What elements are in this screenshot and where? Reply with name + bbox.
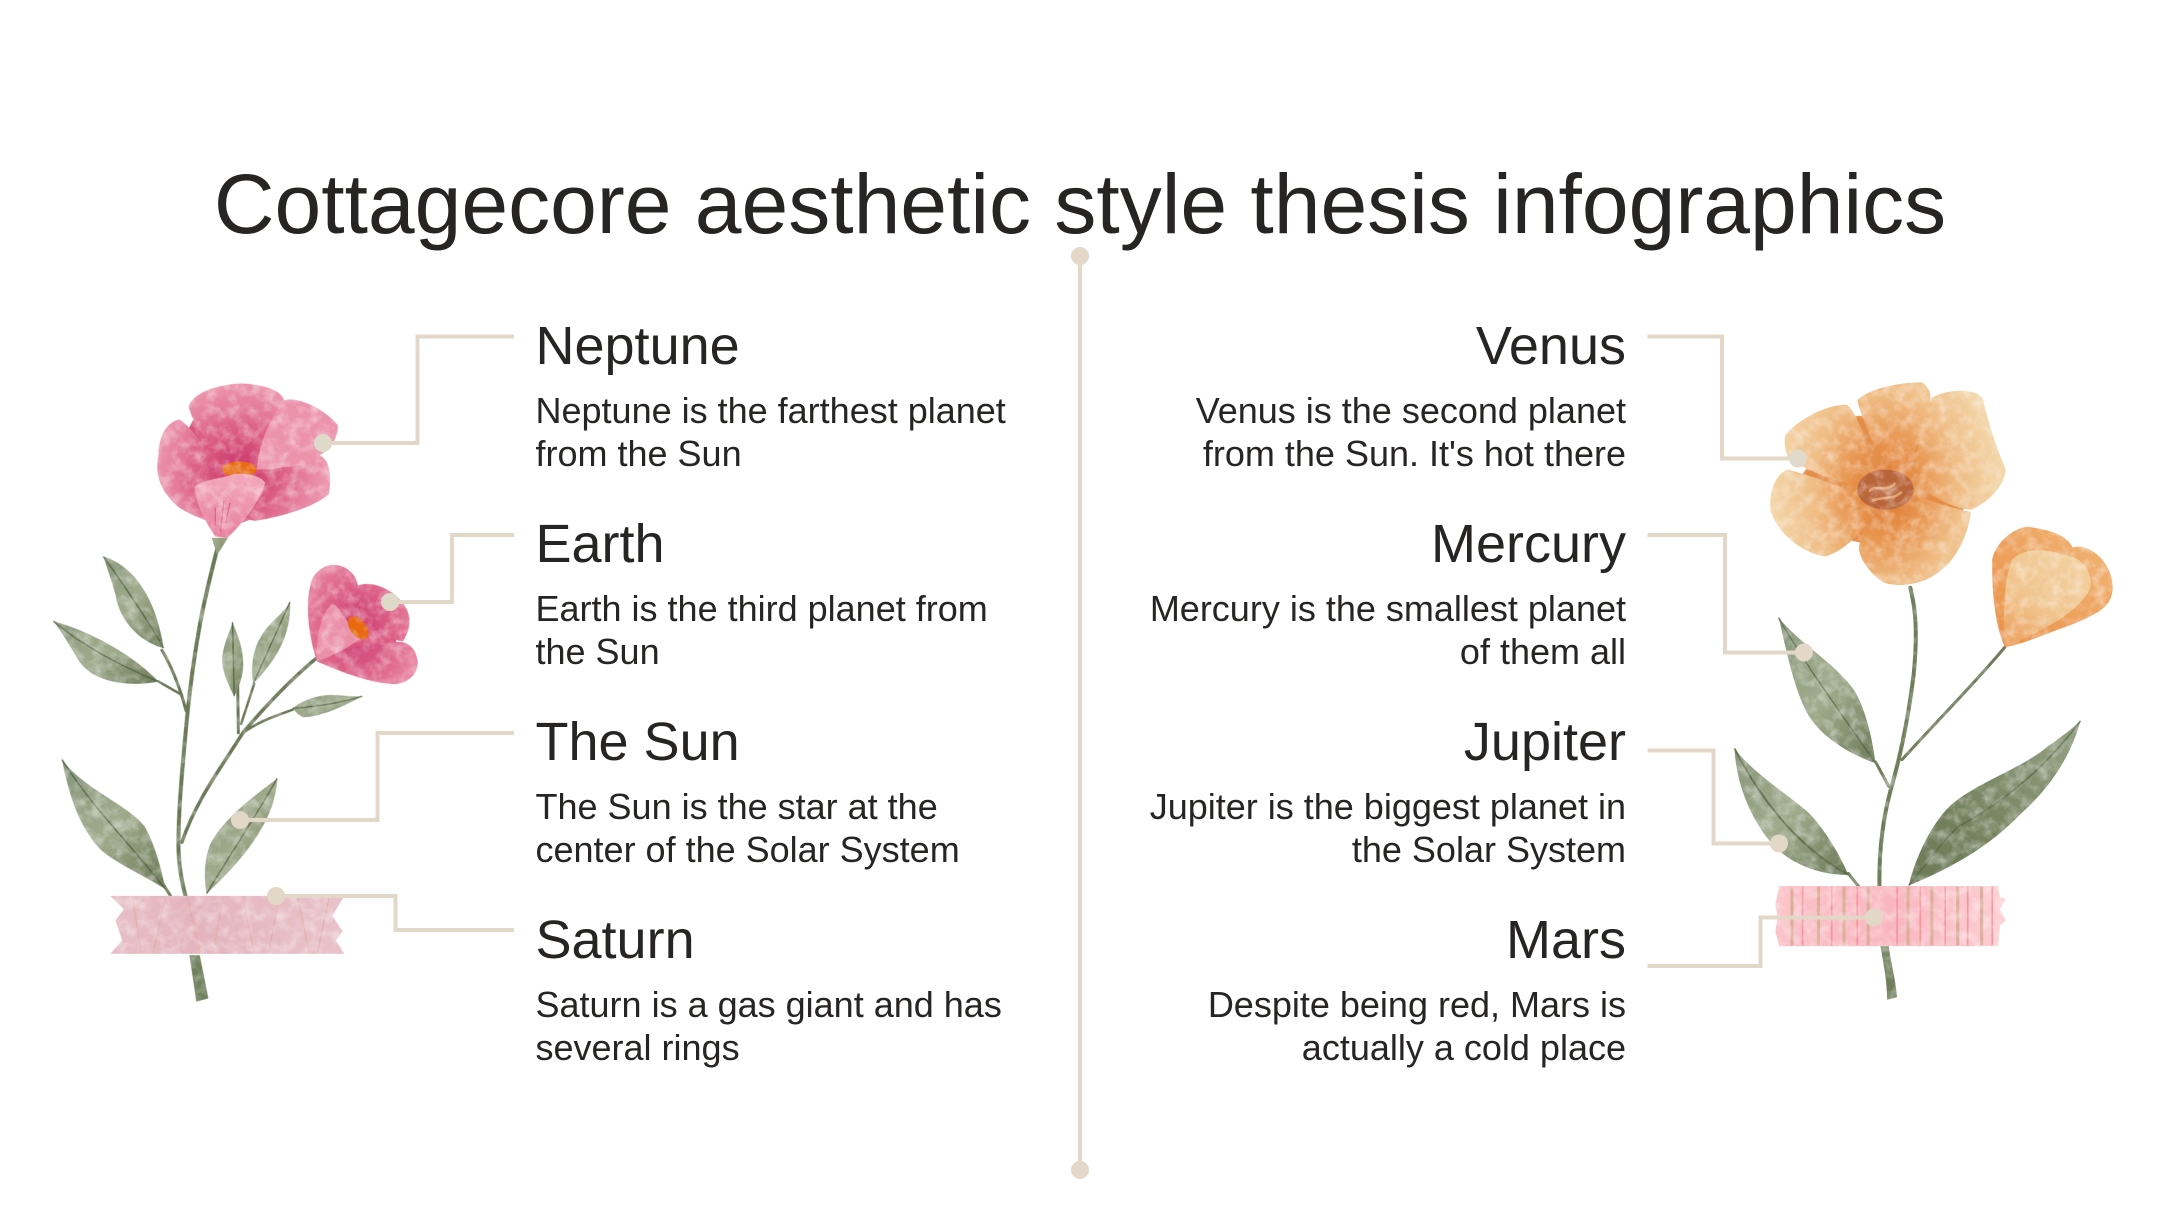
big pink blossom [157, 383, 338, 538]
divider: centre line [1071, 247, 1089, 1179]
text block: Neptune [536, 316, 1006, 474]
body: Mars: Despite being red, Mars is [1208, 984, 1626, 1025]
text block: Saturn [536, 910, 1002, 1068]
body: Neptune: Neptune is the farthest planet [536, 390, 1006, 431]
leaf veins [53, 557, 362, 894]
heading: Saturn: Saturn [536, 910, 695, 970]
heading: Earth: Earth [536, 514, 665, 574]
body: Mars: actually a cold place [1302, 1027, 1626, 1068]
pink washi tape [110, 896, 344, 954]
stem base [1880, 946, 1897, 1000]
text block: Mercury [1150, 514, 1626, 672]
body: Mercury: Mercury is the smallest planet [1150, 588, 1626, 629]
body: Mercury [1150, 588, 1626, 672]
pink striped washi tape [1775, 886, 2006, 946]
body: Saturn [536, 984, 1002, 1068]
heading: Neptune: Neptune [536, 316, 740, 376]
body: Jupiter [1150, 786, 1626, 870]
body: Saturn: several rings [536, 1027, 740, 1068]
body: Earth: the Sun [536, 631, 660, 672]
heading: Mercury: Mercury [1431, 514, 1626, 574]
body: Jupiter: the Solar System [1352, 829, 1626, 870]
stems [158, 550, 315, 898]
body: Venus [1196, 390, 1626, 474]
leaves [1735, 618, 2080, 886]
connector: Earth [381, 535, 514, 611]
body: Jupiter: Jupiter is the biggest planet in [1150, 786, 1626, 827]
body: Mercury: of them all [1460, 631, 1626, 672]
body: The Sun [536, 786, 960, 870]
connector: Saturn [267, 887, 514, 930]
heading: Venus: Venus [1476, 316, 1626, 376]
body: Saturn: Saturn is a gas giant and has [536, 984, 1002, 1025]
leaf veins [1735, 618, 2080, 886]
body: Neptune: from the Sun [536, 433, 742, 474]
connector: The Sun [231, 733, 514, 829]
text block: The Sun [536, 712, 960, 870]
body: The Sun: center of the Solar System [536, 829, 960, 870]
heading: The Sun: The Sun [536, 712, 740, 772]
stem base [189, 955, 208, 1002]
orange bud [1992, 527, 2113, 647]
heading: Jupiter: Jupiter [1464, 712, 1626, 772]
heading: Mars: Mars [1506, 910, 1626, 970]
text block: Jupiter [1150, 712, 1626, 870]
body: Earth [536, 588, 988, 672]
small pink blossom [308, 565, 418, 684]
body: The Sun: The Sun is the star at the [536, 786, 938, 827]
illustration: orange flower with green leaves [1735, 382, 2113, 1000]
title: Cottagecore aesthetic style thesis infographics [214, 157, 1946, 251]
leaves [53, 557, 362, 894]
body: Mars [1208, 984, 1626, 1068]
body: Venus: from the Sun. It's hot there [1203, 433, 1626, 474]
connector: Mercury [1648, 535, 1813, 662]
text block: Earth [536, 514, 988, 672]
illustration: pink flower with green leaves [53, 383, 418, 1002]
calyx [212, 538, 228, 555]
stems [1848, 588, 2005, 887]
text block: Venus [1196, 316, 1626, 474]
text block: Mars [1208, 910, 1626, 1068]
body: Neptune [536, 390, 1006, 474]
connector: Jupiter [1648, 750, 1788, 852]
connector: Venus [1648, 336, 1807, 468]
body: Earth: Earth is the third planet from [536, 588, 988, 629]
connector: Neptune [314, 336, 514, 452]
connector: Mars [1648, 908, 1883, 966]
body: Venus: Venus is the second planet [1196, 390, 1626, 431]
large orange blossom [1770, 382, 2006, 585]
